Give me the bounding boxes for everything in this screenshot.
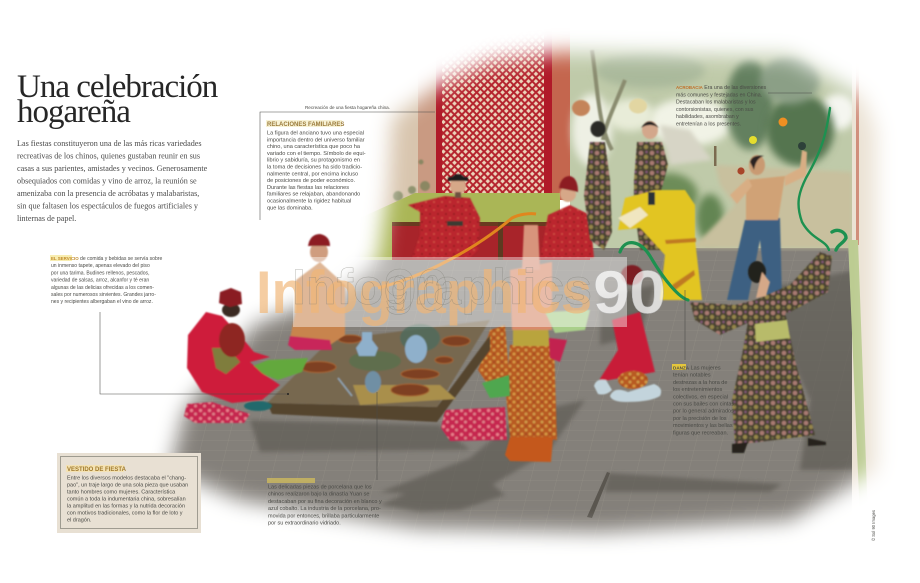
illustration: room scene background [160, 36, 884, 546]
panel body: común a toda la indumentaria china, sobresalían [67, 496, 186, 502]
panel body: tanto hombres como mujeres. Característica [67, 490, 176, 496]
plates [300, 335, 470, 396]
pink pillar [552, 47, 570, 200]
back wall behind lattice [436, 10, 570, 200]
text block: el servicio [50, 255, 162, 305]
dancer dress [732, 310, 815, 445]
lower step edge [587, 472, 610, 518]
kneeling woman hat [621, 265, 643, 285]
woman right hair [641, 122, 659, 128]
dancer sleeves [690, 252, 832, 335]
green cloth [248, 358, 308, 380]
text block: porcelana [267, 478, 382, 526]
text block: porcelana: por su extraordinario vidriado. [268, 520, 341, 526]
dancer head [748, 261, 766, 283]
text block: danza: DANZA Las mujeres [673, 366, 721, 372]
cushions [441, 310, 590, 441]
text block: danza: por la precisión de los [673, 416, 727, 422]
orange ribbon [378, 214, 536, 288]
leader dot [287, 393, 289, 395]
caption: Recreación de una fiesta hogareña china. [305, 105, 390, 110]
intro text: Las fiestas constituyeron una de las más ricas variedades [17, 139, 202, 148]
text block: danza: con sus bailes con cintas, [673, 402, 736, 408]
text block: danza: movimientos y las bellas [673, 423, 733, 429]
text block: danza: destrezas a la hora de [673, 380, 727, 386]
panel body: pao", un traje largo de una sola pieza que usaban [67, 482, 188, 488]
text block: danza [672, 364, 736, 436]
watermark outlined numerals: 90 [384, 258, 449, 323]
watermark orange text: Infographics [256, 259, 592, 326]
woman left [584, 142, 612, 250]
central dancer hem [505, 437, 553, 462]
text block: acrobacia: Destacaban los malabaristas y los [676, 100, 756, 106]
dancer feet [732, 438, 826, 453]
text block: porcelana: Las delicadas piezas de porcelana que los [268, 484, 372, 490]
panel body: Entre los diversos modelos destacaba el "chang- [67, 476, 186, 482]
woman right head [642, 121, 658, 139]
green jars [400, 324, 440, 352]
text block: relaciones familiares: que las dominaba. [267, 205, 313, 211]
woman right [634, 142, 668, 250]
intro text: amenizaba con la presencia de acróbatas y malabaristas, [17, 189, 199, 198]
acrobat [727, 150, 807, 300]
central dancer bodice [510, 262, 552, 330]
acrobat hair [750, 156, 764, 170]
floor shadows [250, 270, 862, 512]
text block: danza: por lo general admirados [673, 409, 734, 415]
watermark: infographics90 [256, 257, 666, 327]
text block: relaciones familiares: ocasionalmente la rigidez habitual [267, 198, 351, 204]
watermark outlined text: Infographics [292, 259, 592, 315]
lion dancer: yellow costume [618, 190, 702, 300]
text block: porcelana: azul cobalto. La industria de la porcelana, pro- [268, 506, 381, 512]
text block: acrobacia [676, 85, 767, 128]
floor tiles [184, 250, 848, 520]
text block: el servicio: por una tarima. Budines rellenos, pescados, [51, 270, 149, 276]
text block: porcelana: movida por entonces, brillaba particularmente [268, 513, 379, 519]
intro text: linternas de papel. [17, 214, 76, 223]
guest cushion [288, 336, 332, 350]
intro text [17, 139, 208, 223]
acrobat arms [730, 150, 807, 204]
low table with dishes [267, 320, 490, 422]
man seated on sofa: elder [408, 174, 480, 258]
intro text: sin que faltasen los espectáculos de fuegos artificiales y [17, 202, 199, 210]
panel body [67, 476, 188, 524]
panel body: con motivos tradicionales, como la flor de loto y [67, 510, 183, 516]
intro text: obsequiados con comidas y vino de arroz, la reunión se [17, 176, 197, 186]
text block: el servicio: sales por numerosos sirvientes. Grandes jarro- [51, 292, 156, 298]
seated guest behind table [288, 234, 345, 350]
seated man sleeve detail [212, 348, 240, 374]
right wall [848, 81, 890, 500]
text block: el servicio: EL SERVICIO de comida y bebidas se servía sobre [51, 256, 162, 262]
text block: relaciones familiares: familiares se relajaban, abandonando [267, 192, 360, 198]
panel body: la amplitud en las formas y la nutrida decoración [67, 504, 185, 510]
title: Una celebración [17, 69, 218, 105]
watermark panel [293, 257, 627, 327]
central dancer skirt [506, 342, 557, 440]
leader lines [100, 93, 812, 480]
seated man hat [219, 288, 242, 307]
guest body [290, 262, 345, 345]
dancer neck [756, 272, 770, 298]
garden women [584, 121, 668, 250]
intro text: recreativas de los chinos, quienes gustaban reunir en sus [17, 152, 200, 160]
text block: el servicio: algunas de las delicias ofrecidas a los comen- [51, 285, 154, 291]
garden background [566, 40, 852, 250]
green mat and man at table [184, 288, 308, 423]
text block: acrobacia: más comunes y festejadas en China. [676, 92, 762, 98]
spoon [338, 378, 352, 396]
guest head [310, 242, 328, 262]
text block: el servicio: nes y recipientes albergaban el vino de arroz. [51, 299, 153, 305]
floor [160, 248, 852, 546]
table side [267, 335, 490, 422]
central dancer sleeves and arms [478, 325, 510, 388]
juggling balls [737, 118, 806, 175]
text block: porcelana: destacaban por su fina decoración en blanco y [268, 499, 382, 505]
text block: danza: figuras que recreaban. [673, 430, 729, 436]
wall vines [393, 160, 430, 201]
acrobat torso [746, 176, 785, 220]
text block: acrobacia: entretenían a los presentes. [676, 122, 741, 128]
text block: relaciones familiares: La figura del anciano tuvo una especial [267, 130, 364, 136]
text block: relaciones familiares: de posiciones de poder económico. [267, 178, 355, 184]
kneeling woman in red [594, 265, 661, 402]
panel heading: VESTIDO DE FIESTA [67, 467, 127, 473]
title: hogareña [17, 94, 131, 130]
text block: relaciones familiares: importancia dentro del universo familiar [267, 137, 365, 143]
panel body: el dragón. [67, 518, 92, 524]
seated man robe [187, 312, 280, 403]
lattice screen [436, 40, 552, 193]
acrobat head [749, 155, 765, 175]
text block: acrobacia: habilidades, asombraban y [676, 114, 739, 120]
text block: danza: colectivos, en especial [673, 394, 728, 400]
text block: acrobacia: ACROBACIA Era una de las diversiones [676, 85, 767, 91]
seated man back detail [219, 323, 245, 357]
acrobat jeans [727, 218, 782, 300]
central dancer in orange [478, 225, 557, 462]
guest hat [308, 234, 330, 246]
seated man head [222, 303, 240, 317]
text block: relaciones familiares: nalmente central, por encima incluso [267, 171, 358, 177]
text block: relaciones familiares: Durante las fiestas las relaciones [267, 185, 349, 191]
credit: © Sol 90 Images [871, 510, 876, 541]
central dancer sash [513, 328, 550, 346]
text block: danza: tenían notables [673, 373, 711, 379]
sofa [360, 193, 590, 260]
text block: relaciones familiares: RELACIONES FAMILIARES [267, 122, 344, 128]
title [17, 69, 218, 130]
table top [267, 320, 490, 407]
text block: el servicio: un inmenso tapete, apenas elevado del piso [51, 263, 150, 269]
text block: relaciones familiares: variado con el tiempo. Símbolo de equi- [267, 151, 366, 157]
central dancer raised arm [522, 225, 540, 270]
dancer sash [755, 320, 790, 342]
dancer with dark floral dress [690, 252, 832, 453]
text block: el servicio: variedad de salsas, arroz, alcanfor y té eran [51, 278, 149, 284]
text block: relaciones familiares: librio y sabiduría, su protagonismo en [267, 158, 360, 164]
back wall left [372, 85, 418, 212]
text block: danza: los entretenimientos [673, 387, 722, 393]
text block: relaciones familiares: chino, una característica que poco ha [267, 144, 361, 150]
blue vases [356, 332, 427, 393]
seated man cushion [184, 402, 250, 423]
watermark white numerals: 90 [593, 259, 666, 326]
mat [353, 385, 456, 405]
green ribbon [620, 108, 846, 300]
text block: porcelana: chinos realizaron bajo la dinastía Yuan se [268, 492, 369, 498]
text block: relaciones familiares: la toma de decisiones ha sido tradicio- [267, 164, 362, 170]
seated man boot [244, 401, 272, 411]
kneeling woman socks [594, 380, 661, 402]
intro text: casas a sus parientes, amistades y vecinos. Generosamente [17, 164, 208, 173]
hanging lanterns [572, 98, 647, 116]
panel: vestido de fiesta [57, 453, 201, 533]
kneeling woman sash [618, 371, 648, 389]
woman left head [590, 121, 606, 137]
man seated on sofa: companion [540, 176, 594, 258]
text block: acrobacia: contorsionistas, quienes, con sus [676, 107, 754, 113]
large bowl [349, 351, 401, 371]
text block: relaciones familiares [266, 120, 366, 211]
